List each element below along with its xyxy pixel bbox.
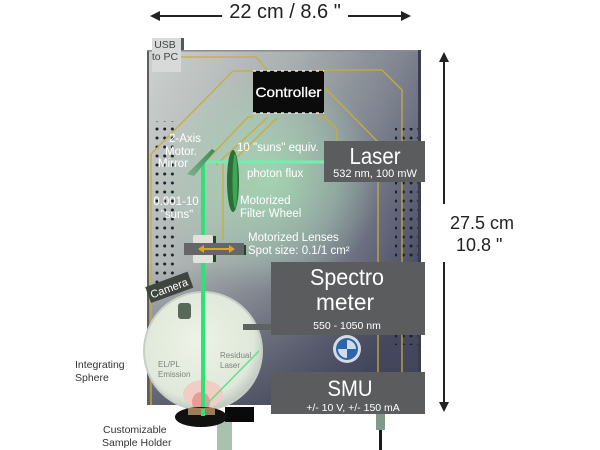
laser module [324,141,425,182]
SMU module: +/- 10 V, +/- 150 mA [306,402,400,414]
USB to PC label [152,38,184,72]
controller chip [253,71,324,113]
height dimension: 10.8 " [456,235,502,255]
integrating sphere [144,263,271,412]
sample holder label: Sample Holder [102,437,172,449]
filter labels: 10 "suns" equiv. [237,142,318,154]
camera label [145,272,193,303]
mirror labels: 2-Axis [169,133,201,145]
width dimension: 22 cm / 8.6 " [229,1,341,23]
SMU module [271,372,425,414]
SMU module: SMU [328,376,372,401]
integrating sphere: Emission [158,370,190,379]
SMU connector cable [376,414,385,450]
width dimension [150,0,411,24]
laser module: Laser [350,143,401,169]
icon: logo button [333,335,361,363]
wiring traces [151,57,402,405]
filter labels: Filter Wheel [240,208,301,220]
height dimension: 27.5 cm [450,213,514,233]
integrating sphere label: Integrating [75,359,125,371]
mirror labels: Mirror [158,158,188,170]
USB to PC label: USB [154,39,176,51]
height dimension [439,52,514,412]
integrating sphere label: Sphere [75,372,109,384]
spectrometer module [271,262,425,335]
lens labels [248,232,350,257]
camera label: Camera [149,276,191,301]
icon: filter wheel [227,150,239,212]
panel: instrument enclosure [147,50,421,405]
integrating sphere label [75,359,125,384]
integrating sphere: EL/PL [158,360,180,369]
lens labels: Motorized Lenses [248,232,339,244]
spectrometer module: Spectro [310,264,384,290]
lens labels: Spot size: 0.1/1 cm² [248,245,350,257]
sample holder label [102,424,172,449]
mirror labels: Motor. [165,146,197,158]
filter labels: Motorized [240,195,290,207]
sample holder label: Customizable [103,424,167,436]
mirror labels [153,133,201,221]
mirror labels: "suns" [161,209,193,221]
icon: two-axis mirror [187,149,215,176]
spectrometer module: 550 - 1050 nm [313,320,381,332]
laser beam [203,162,324,235]
filter labels [237,142,318,220]
laser module: 532 nm, 100 mW [333,168,417,180]
mirror labels: 0.001-10 [153,196,199,208]
sample holder [175,407,254,450]
spectrometer module: meter [316,289,374,315]
USB to PC label: to PC [152,51,179,63]
motorized lenses [184,235,246,263]
filter labels: photon flux [247,168,304,180]
integrating sphere: Laser [220,361,240,370]
controller chip: Controller [256,84,322,100]
integrating sphere: Residual [220,351,251,360]
